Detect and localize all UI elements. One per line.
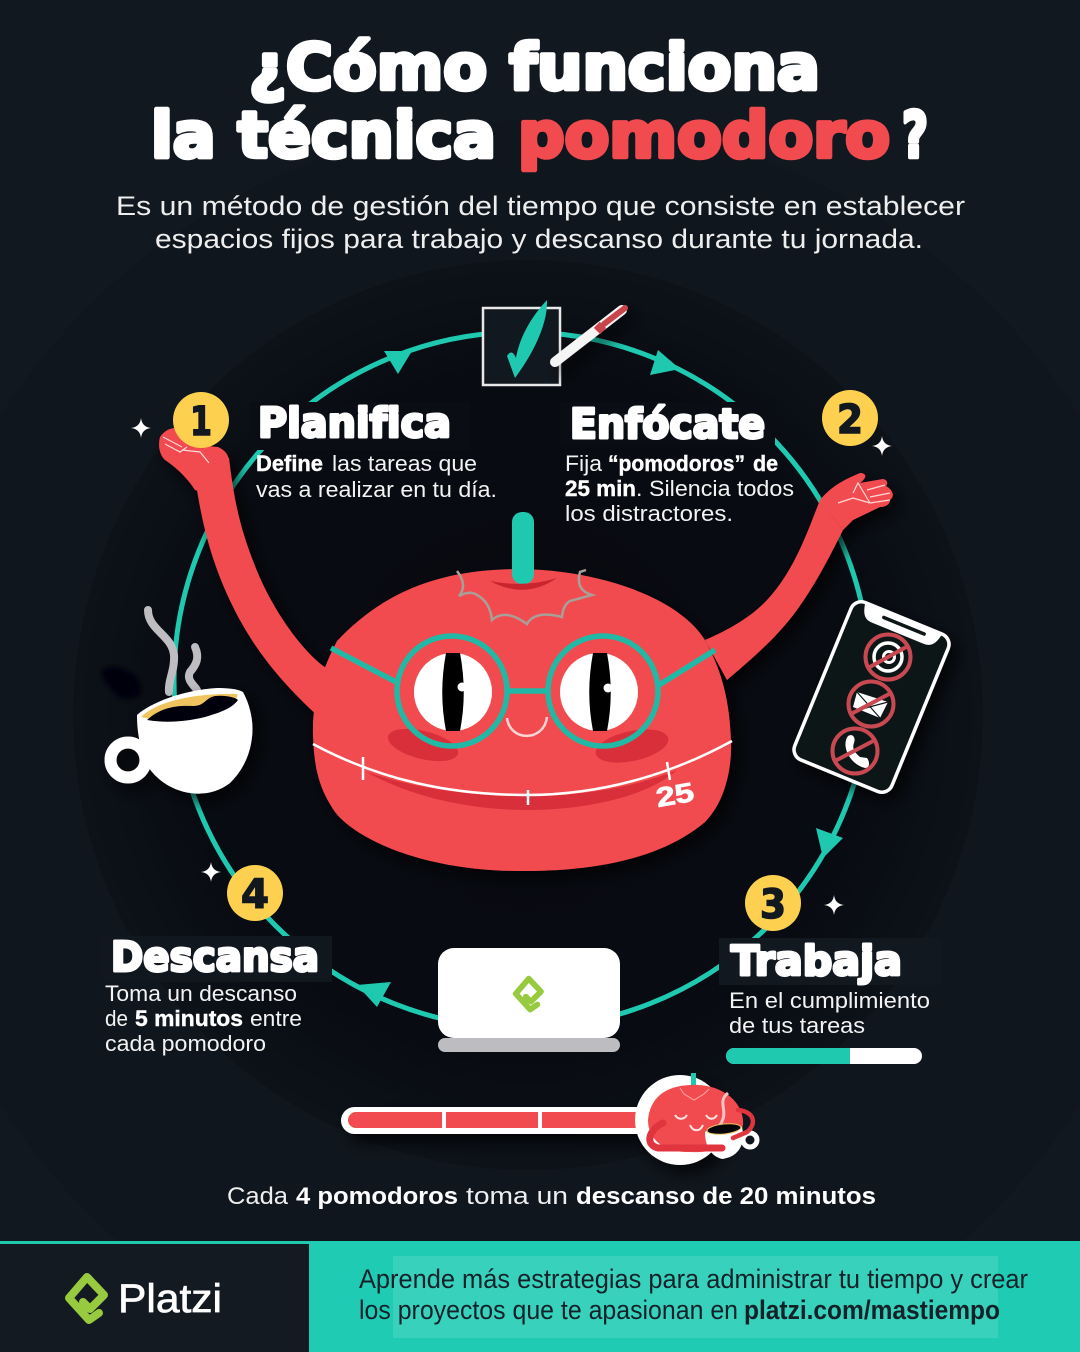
step 4: descansa: cada pomodoro	[105, 1031, 266, 1056]
left arm	[193, 458, 326, 716]
work progress bar	[726, 1048, 922, 1064]
step 3: trabaja: Trabaja	[731, 937, 902, 985]
blocked icon: telephone	[832, 728, 878, 774]
heading mask: planifica	[250, 402, 470, 450]
step 2: enfocate	[565, 400, 794, 526]
badge 2: 2	[837, 397, 863, 443]
left hand	[159, 428, 234, 502]
small calyx	[680, 1088, 709, 1100]
icon: laptop	[438, 948, 620, 1052]
heading mask: trabaja	[719, 938, 941, 985]
smile	[507, 717, 547, 736]
character: tomato timer	[159, 428, 893, 871]
step 3: trabaja: de tus tareas	[729, 1013, 865, 1038]
right arm	[705, 500, 843, 680]
platzi logo mark	[69, 1277, 104, 1320]
cheeks	[385, 723, 461, 767]
tomato body	[313, 569, 731, 871]
calyx outline	[457, 570, 592, 624]
step 2: enfocate: Fija	[565, 451, 603, 476]
long break caption	[227, 1183, 876, 1210]
badge 3	[745, 875, 801, 931]
laptop logo	[516, 979, 541, 1010]
right hand	[820, 473, 893, 530]
badge 4	[227, 865, 283, 921]
badge 1	[173, 392, 229, 448]
heading mask: enfocate	[560, 402, 775, 447]
sparkles	[131, 418, 892, 915]
left hand creases	[163, 437, 209, 463]
step 3: trabaja: En el cumplimiento	[729, 988, 930, 1013]
stem	[512, 512, 534, 584]
step 2: enfocate: de	[753, 451, 778, 476]
small tomato body	[648, 1085, 743, 1152]
step 3: trabaja	[729, 937, 930, 1038]
resting tomato with coffee	[648, 1073, 757, 1159]
icon: pen	[555, 308, 625, 362]
step 4: descansa: Toma un descanso	[105, 981, 297, 1006]
step 2: enfocate: Enfócate	[570, 400, 765, 448]
long break caption: 4 pomodoros	[296, 1183, 458, 1210]
step 4: descansa	[105, 933, 319, 1056]
step 2: enfocate: . Silencia todos	[636, 476, 794, 501]
heading mask: descansa	[102, 936, 332, 982]
step 1: planifica: Define	[256, 451, 323, 476]
step 1: planifica: las tareas que	[332, 451, 477, 476]
icon: phone with blocked notifications	[791, 598, 952, 796]
step 4: descansa: de	[105, 1006, 128, 1031]
long break caption: descanso de 20 minutos	[576, 1183, 876, 1210]
cycle ring with arrows	[174, 332, 870, 1028]
step 2: enfocate: 25 min	[565, 476, 636, 501]
title: pomodoro	[518, 99, 890, 172]
step 4: descansa: 5 minutos	[135, 1006, 243, 1031]
subtitle: espacios fijos para trabajo y descanso durante tu jornada.	[155, 224, 923, 254]
icon: coffee cup	[102, 610, 253, 794]
glasses	[331, 636, 715, 746]
step 4: descansa: entre	[250, 1006, 302, 1031]
footer call to action panel: los proyectos que te apasionan en	[359, 1295, 738, 1325]
badge 4: 4	[241, 872, 269, 918]
footer brand panel	[0, 1241, 309, 1352]
long break caption: Cada	[227, 1183, 289, 1210]
footer call to action panel: Aprende más estrategias para administrar tu tiempo y crear	[359, 1264, 1028, 1294]
closed eyes and smile	[675, 1115, 717, 1130]
cup cast smudge	[102, 667, 141, 699]
steam	[148, 610, 197, 692]
badge 3: 3	[760, 882, 786, 928]
blocked icon: email at sign	[866, 634, 910, 680]
footer call to action panel: platzi.com/mastiempo	[744, 1295, 1000, 1325]
platzi wordmark: Platzi	[118, 1277, 222, 1321]
long break timer bar	[341, 1075, 725, 1165]
title: ¿Cómo funciona	[249, 31, 820, 104]
right hand creases	[838, 483, 890, 503]
step 1: planifica: vas a realizar en tu día.	[256, 477, 497, 502]
dial crescent	[367, 770, 677, 810]
small arm	[650, 1123, 722, 1148]
small cup	[743, 1133, 757, 1147]
step 4: descansa: Descansa	[111, 933, 319, 981]
blocked icon: envelope	[848, 682, 894, 726]
title	[151, 31, 928, 172]
eyes	[414, 653, 638, 731]
badge 2	[822, 390, 878, 446]
subtitle	[116, 191, 965, 254]
footer call to action panel	[309, 1241, 1080, 1352]
step 1: planifica: Planifica	[258, 399, 451, 447]
subtitle: Es un método de gestión del tiempo que consiste en establecer	[116, 191, 965, 221]
small stem	[691, 1073, 696, 1089]
steam	[720, 1093, 728, 1125]
title: la técnica	[151, 99, 496, 172]
title: ?	[902, 99, 928, 172]
badge 1: 1	[190, 399, 212, 445]
stem crease	[490, 578, 557, 590]
step 2: enfocate: los distractores.	[565, 501, 733, 526]
icon: checkbox with check mark	[483, 300, 560, 385]
timer number: 25	[654, 777, 696, 813]
step 1: planifica	[256, 399, 497, 502]
long break caption: toma un	[466, 1183, 568, 1210]
body and arms silhouette	[159, 428, 893, 871]
step 2: enfocate: “pomodoros”	[608, 451, 745, 476]
timer dial	[313, 741, 732, 795]
